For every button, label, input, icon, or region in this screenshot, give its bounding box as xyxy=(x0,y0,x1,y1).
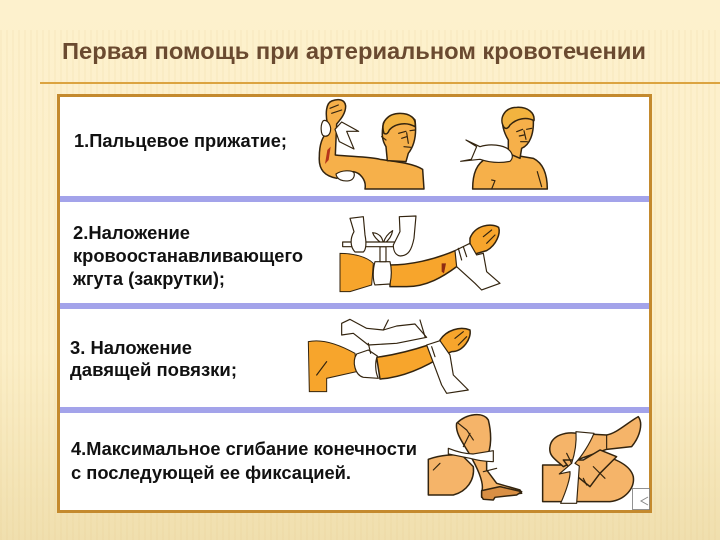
title: Первая помощь при артериальном кровотечении xyxy=(62,38,646,64)
text: method 2: кровоостанавливающего xyxy=(73,245,303,266)
illustration: flexed hip with bandage xyxy=(543,417,641,503)
text: method 4: с последующей ее фиксацией. xyxy=(71,462,351,483)
text: method 3: давящей повязки; xyxy=(70,359,237,380)
text: method 2 xyxy=(72,222,303,289)
illustration: pressure bandage on arm xyxy=(308,319,470,393)
illustration: pressing carotid artery xyxy=(461,107,547,189)
small slide control corner xyxy=(632,488,650,510)
text: method 3: 3. Наложение xyxy=(70,337,192,358)
text: method 4 xyxy=(71,438,417,483)
illustration: flexed knee with bandage xyxy=(428,415,522,500)
illustration: tourniquet on arm xyxy=(340,216,500,292)
text: method 2: жгута (закрутки); xyxy=(72,268,225,289)
text: method 2: 2.Наложение xyxy=(73,222,190,243)
text: method 1: 1.Пальцевое прижатие; xyxy=(74,130,287,151)
illustration: man pressing brachial artery xyxy=(319,100,424,189)
panel: first aid methods xyxy=(58,96,650,512)
text: method 4: 4.Максимальное сгибание конечности xyxy=(71,438,417,459)
text: method 3 xyxy=(70,337,237,380)
